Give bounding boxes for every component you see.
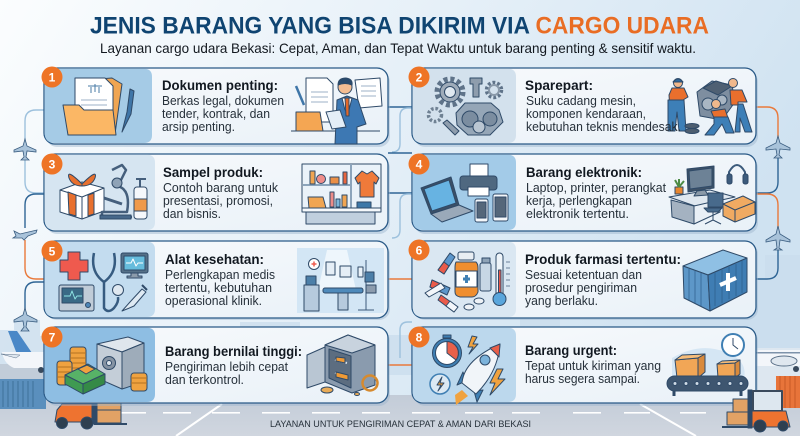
text: sparepart: kebutuhan teknis mendesak. (526, 119, 681, 134)
text: sparepart: komponen kendaraan, (526, 106, 646, 121)
text: bernilai: dan terkontrol. (165, 372, 244, 387)
text: farmasi: Produk farmasi tertentu: (525, 251, 681, 267)
text: bernilai (165, 343, 302, 387)
badge 8 (408, 326, 430, 348)
icon: legal folder (63, 78, 134, 135)
panel: card 1 dokumen (42, 66, 390, 147)
text: sparepart: Sparepart: (525, 77, 593, 93)
icon: gift, microscope, bottle (60, 165, 147, 219)
text: bernilai: Pengiriman lebih cepat (165, 359, 288, 374)
icon: plane 2 (13, 230, 37, 240)
badge 1: 1 (49, 70, 56, 84)
text: urgent: Barang urgent: (525, 342, 617, 358)
badge 1 (42, 66, 62, 88)
text: farmasi: yang berlaku. (525, 293, 598, 308)
panel: card 7 bernilai (42, 326, 390, 406)
text: kesehatan: Perlengkapan medis (165, 267, 275, 282)
text: sampel: Contoh barang untuk (163, 180, 278, 195)
panel: card 8 urgent (408, 326, 758, 406)
icon: mechanics and engine (668, 78, 752, 135)
icon: laptop printer phones (421, 164, 508, 222)
icon: gears and engine (428, 78, 503, 135)
text: urgent: Tepat untuk kiriman yang (525, 358, 661, 373)
text: elektronik: Laptop, printer, perangkat (526, 180, 666, 195)
text: dokumen: Berkas legal, dokumen (162, 93, 284, 108)
icon: clinic room (297, 248, 384, 313)
panel: card 3 sampel (42, 154, 390, 234)
footer caption: LAYANAN UNTUK PENGIRIMAN CEPAT & AMAN DARI BEKASI (270, 419, 531, 430)
text: dokumen: Dokumen penting: (162, 77, 278, 93)
text: kesehatan: operasional klinik. (165, 293, 262, 308)
text: sampel: Sampel produk: (163, 164, 263, 180)
text: elektronik: kerja, perlengkapan (526, 193, 632, 208)
text: sampel: dan bisnis. (163, 206, 221, 221)
text: kesehatan (165, 251, 275, 308)
badge 7: 7 (49, 330, 56, 344)
badge 4: 4 (416, 158, 423, 172)
icon: conveyor with boxes and clock (667, 334, 748, 396)
badge 6: 6 (416, 244, 423, 258)
icon: plane 5 (766, 226, 790, 250)
text: dokumen (162, 77, 284, 134)
icon: open safe (307, 335, 378, 396)
badge 3: 3 (49, 158, 56, 172)
panel: card 5 kesehatan (42, 240, 390, 320)
badge 2: 2 (416, 70, 423, 84)
text: elektronik: elektronik tertentu. (526, 206, 629, 221)
icon: desk, headphones, box (669, 165, 755, 224)
panel: card 4 elektronik (408, 154, 758, 234)
badge 4 (408, 154, 430, 174)
panel: card 2 sparepart (408, 66, 758, 147)
text: farmasi: Sesuai ketentuan dan (525, 267, 642, 282)
airport scene right (756, 350, 800, 408)
text: elektronik (526, 164, 666, 221)
text: farmasi (525, 251, 681, 308)
icon: plane 4 (766, 136, 790, 158)
panel: card 6 farmasi (408, 240, 758, 320)
forklift left (55, 396, 127, 429)
badge 6 (408, 240, 430, 260)
text: kesehatan: tertentu, kebutuhan (165, 280, 272, 295)
text: urgent (525, 342, 661, 386)
icon: medical equipment (59, 252, 148, 311)
text: dokumen: arsip penting. (162, 119, 235, 134)
text: sparepart: Suku cadang mesin, (526, 93, 636, 108)
badge 5: 5 (49, 244, 56, 258)
badge 7 (42, 326, 62, 348)
icon: safe, coins, cash (57, 337, 147, 394)
airport scene left (0, 331, 46, 409)
text: sampel: presentasi, promosi, (163, 193, 273, 208)
text: sampel (163, 164, 278, 221)
icon: pills and thermometer (425, 252, 510, 312)
text: sparepart (525, 77, 681, 134)
badge 8: 8 (416, 330, 423, 344)
title: JENIS BARANG YANG BISA DIKIRIM VIA CARGO UDARA (90, 12, 709, 40)
subtitle: Layanan cargo udara Bekasi: Cepat, Aman, dan Tepat Waktu untuk barang penting & sensitif waktu. (100, 40, 696, 56)
icon: plane 1 (14, 139, 36, 160)
text: urgent: harus segera sampai. (525, 371, 640, 386)
icon: plane 3 (14, 308, 37, 331)
text: kesehatan: Alat kesehatan: (165, 251, 264, 267)
badge 3 (42, 154, 62, 174)
text: elektronik: Barang elektronik: (526, 164, 642, 180)
icon: cargo container (683, 250, 747, 311)
text: bernilai: Barang bernilai tinggi: (165, 343, 302, 359)
icon: display case (302, 164, 381, 224)
icon: businessman with contract (291, 78, 382, 144)
text: farmasi: prosedur pengiriman (525, 280, 637, 295)
text: dokumen: tender, kontrak, dan (162, 106, 270, 121)
icon: stopwatch, rocket, bolts (430, 335, 505, 405)
connector lines (25, 107, 778, 365)
badge 2 (408, 66, 430, 88)
badge 5 (42, 240, 62, 262)
forklift right (722, 390, 790, 432)
